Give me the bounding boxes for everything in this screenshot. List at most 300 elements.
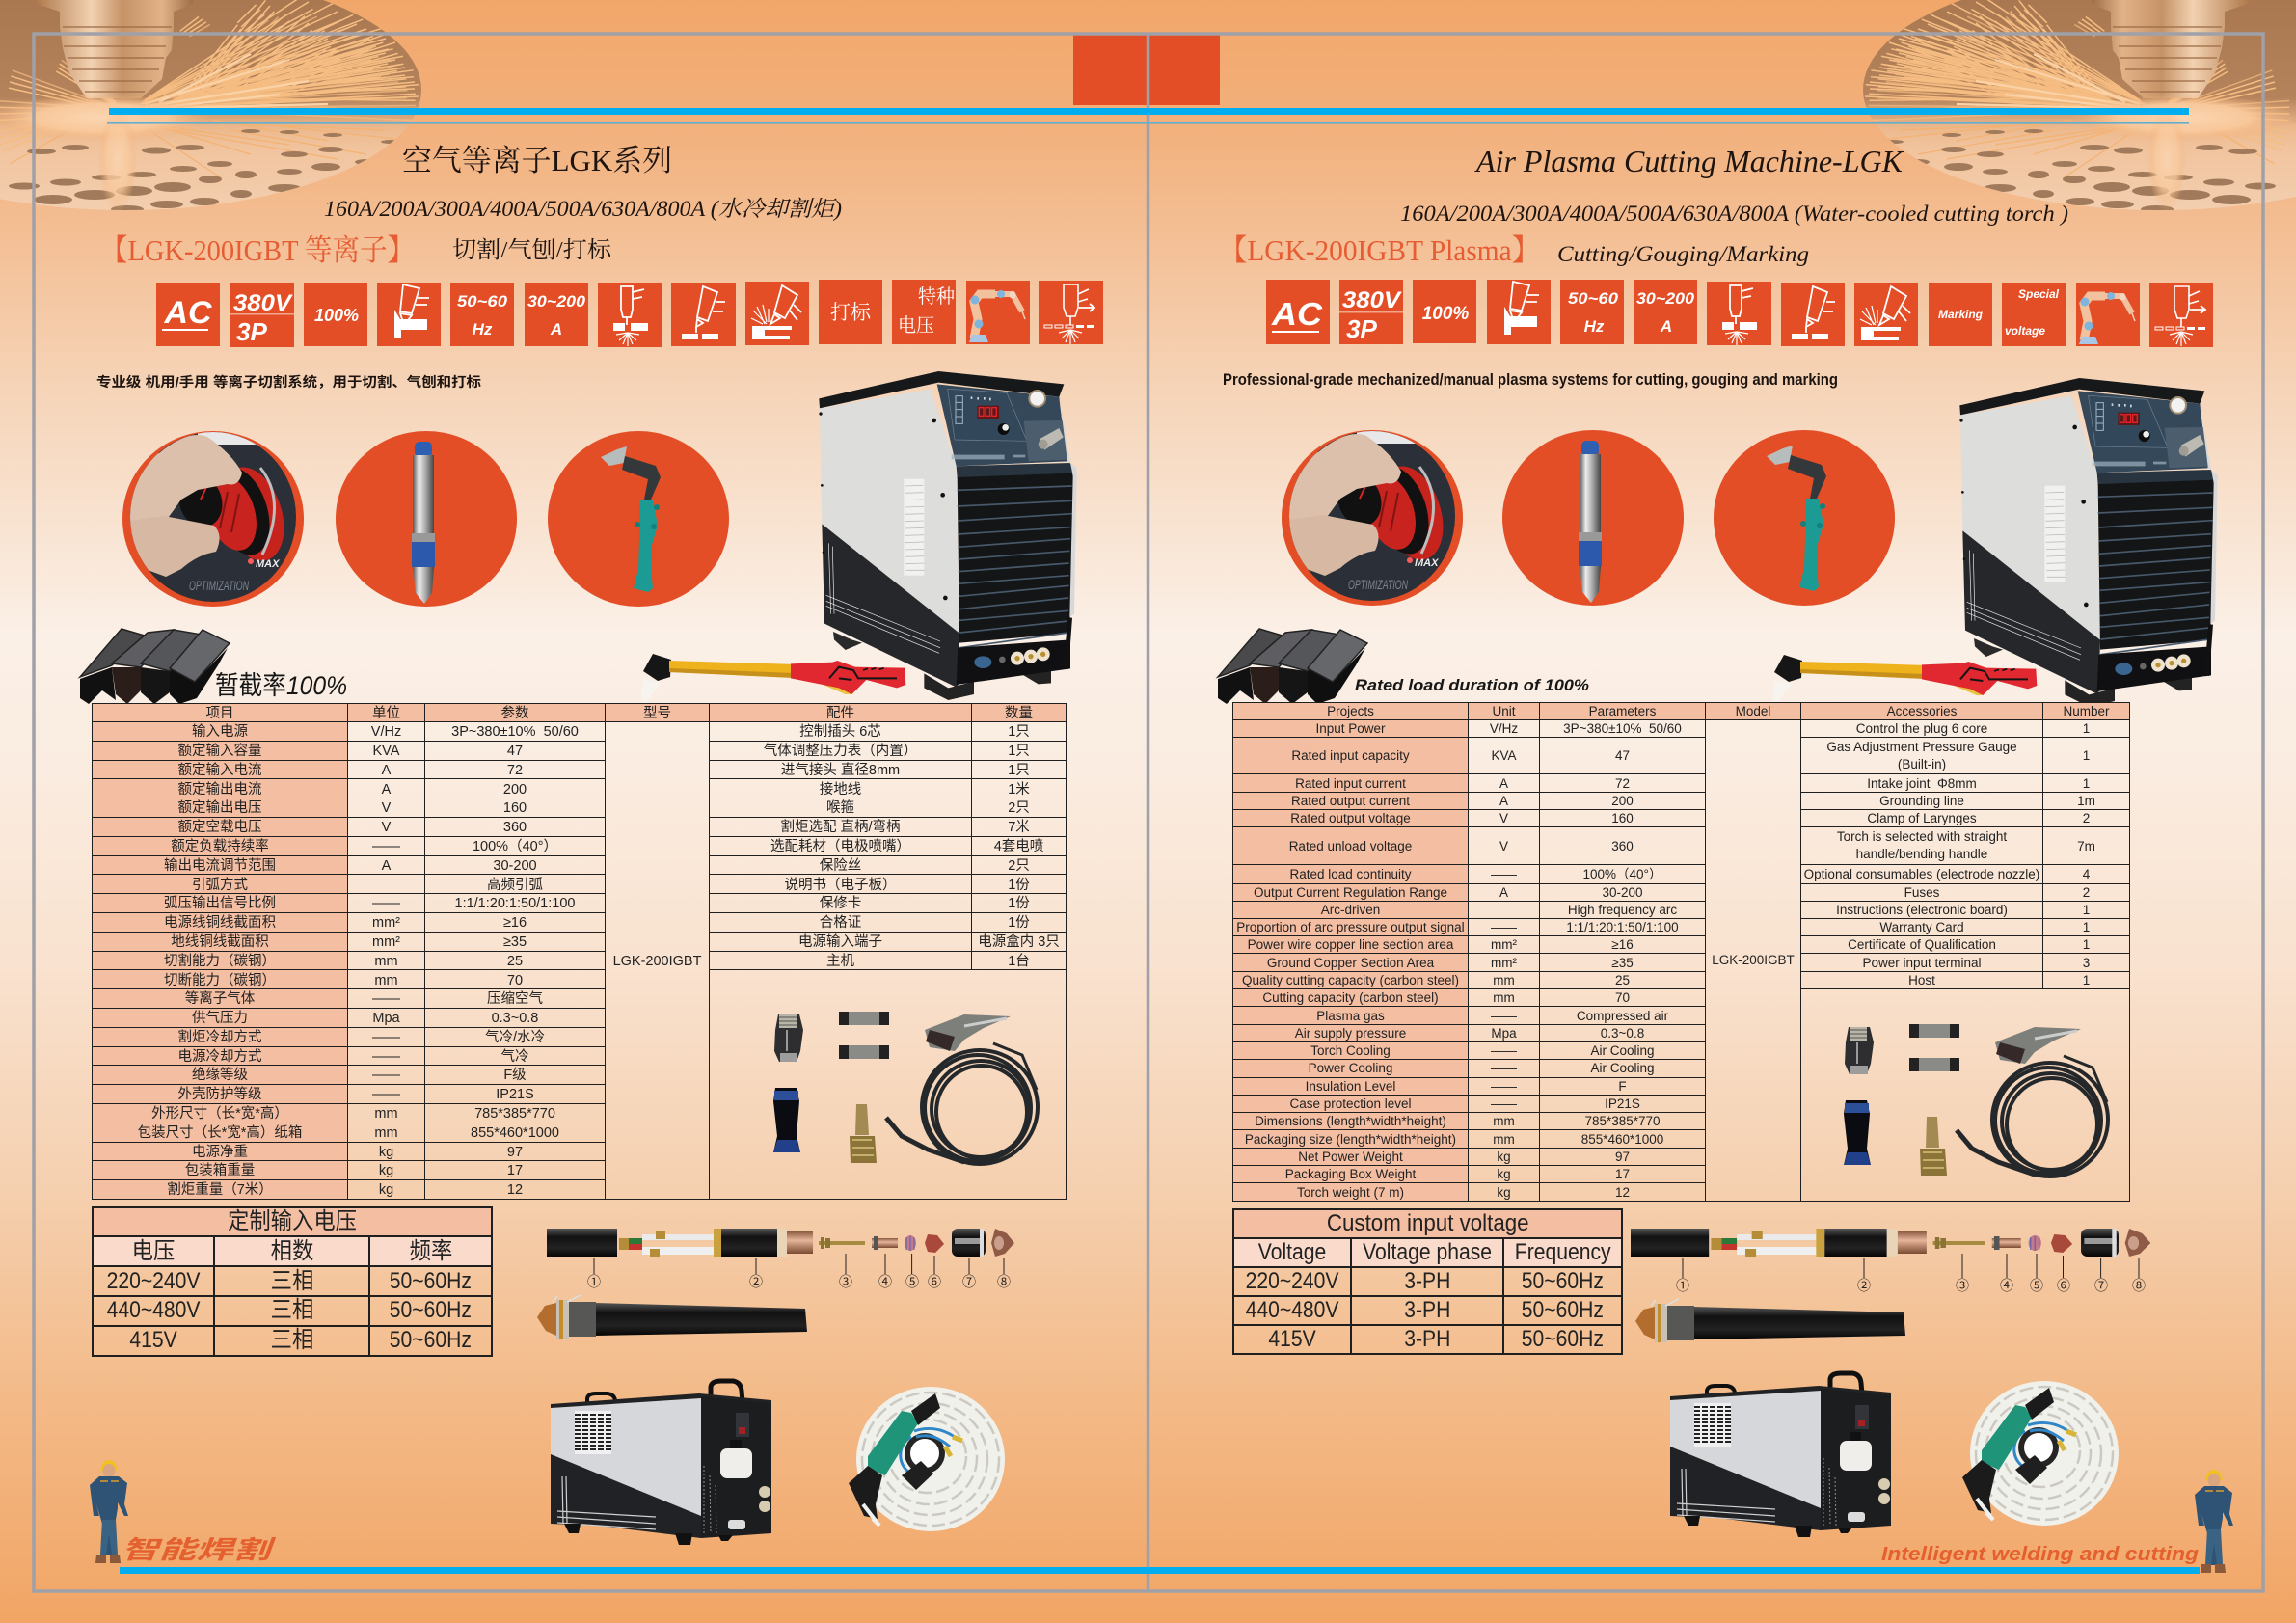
left feature photo: hand torch: [548, 431, 729, 607]
icon: marking: Marking: [1938, 308, 1984, 321]
icon: 50~60 Hz: 50~60: [457, 292, 508, 311]
left custom voltage table: 电压: [132, 1238, 175, 1263]
left specification table: 7米: [1008, 820, 1030, 835]
left specification table: 1份: [1008, 878, 1030, 893]
right specification table: ——: [1491, 1096, 1517, 1111]
right specification table: Rated input current: [1295, 776, 1406, 791]
left specification table: 70: [507, 972, 523, 987]
right torch parts diagram: ③: [1956, 1278, 1969, 1293]
right specification table: mm: [1493, 990, 1515, 1005]
icon: 100%: [1413, 280, 1476, 343]
left feature photo: machine torch: [336, 431, 517, 607]
icon: moving torch: [2149, 283, 2213, 347]
icon: sparks torch: [1854, 283, 1918, 346]
left specification table: KVA: [373, 744, 399, 759]
left specification table: 控制插头 6芯: [799, 724, 881, 740]
left specification table: 3P~380±10% 50/60: [451, 724, 579, 740]
left specification table: 电源净重: [192, 1145, 248, 1160]
left custom voltage table: 三相: [270, 1267, 313, 1294]
icon: special voltage: [2002, 283, 2066, 346]
right specification table: Clamp of Larynges: [1867, 811, 1977, 825]
icon: 100%: 100%: [1422, 304, 1469, 324]
right specification table: Torch weight (7 m): [1297, 1184, 1404, 1200]
left specification table: 输出电流调节范围: [164, 858, 276, 874]
left specification table: 额定输入电流: [177, 763, 262, 778]
icon: 380V 3P: 380V: [233, 290, 293, 316]
left specification table: 1只: [1008, 744, 1030, 759]
right duty cycle label: Rated load duration of 100%: [1355, 677, 1589, 694]
right specification table: Rated unload voltage: [1289, 839, 1412, 853]
right specification table: Warranty Card: [1879, 920, 1964, 934]
right specification table: 97: [1615, 1150, 1630, 1164]
right specification table: 1m: [2077, 794, 2095, 808]
right custom voltage table: 50~60Hz: [1522, 1268, 1604, 1294]
left title: 空气等离子LGK系列: [402, 144, 672, 177]
icon: 50~60 Hz: Hz: [473, 320, 493, 338]
right specification table: Accessories: [1887, 704, 1957, 718]
right feature photo: machine torch: [1502, 430, 1684, 606]
right torch parts diagram: [1631, 1229, 2150, 1293]
left specification table: F级: [503, 1068, 527, 1083]
right specification table: 3: [2083, 956, 2090, 970]
right subtitle: 160A/200A/300A/400A/500A/630A/800A (Water-cooled cutting torch ): [1400, 202, 2068, 226]
left specification table: 绝缘等级: [192, 1068, 248, 1083]
right specification table: Output Current Regulation Range: [1254, 885, 1447, 900]
right specification table: 1: [2083, 748, 2090, 763]
left specification table: 1只: [1008, 724, 1030, 740]
icon: 380V 3P: 3P: [236, 317, 268, 346]
right specification table: ——: [1491, 1009, 1517, 1023]
left specification table: 1:1/1:20:1:50/1:100: [455, 896, 575, 911]
left specification table: 1米: [1008, 782, 1030, 798]
right torch coil: [1962, 1381, 2119, 1526]
icon: 100%: 100%: [314, 306, 359, 325]
left specification table: ≥35: [503, 934, 527, 950]
icon: 100%: [304, 283, 367, 346]
bottom blue bar: [120, 1567, 2200, 1574]
right yellow torch: [1772, 655, 2037, 710]
right specification table: A: [1499, 794, 1508, 808]
left torch parts diagram: ⑧: [997, 1274, 1011, 1289]
left specification table: 主机: [826, 954, 854, 969]
left specification table: 97: [507, 1145, 523, 1160]
left torch parts diagram: ③: [839, 1274, 852, 1289]
right specification table: 12: [1615, 1184, 1630, 1200]
left long torch: [537, 1295, 807, 1339]
left custom voltage table: 相数: [270, 1238, 313, 1263]
left model heading: 【LGK-200IGBT 等离子】: [100, 233, 415, 267]
right specification table: Quality cutting capacity (carbon steel): [1242, 973, 1459, 987]
right specification table: Rated output current: [1291, 794, 1410, 808]
right specification table: Torch Cooling: [1310, 1043, 1391, 1058]
right torch parts diagram: ④: [2000, 1278, 2013, 1293]
left specification table: 额定空载电压: [177, 820, 262, 835]
right custom voltage table: 415V: [1268, 1326, 1316, 1352]
left specification table: 地线铜线截面积: [171, 934, 269, 950]
left custom voltage table: 220~240V: [107, 1267, 200, 1294]
left specification table: 割炬重量（7米）: [167, 1182, 273, 1198]
right specification table: Power Cooling: [1309, 1061, 1392, 1075]
right specification table: 160: [1611, 811, 1634, 825]
left specification table: 保修卡: [820, 896, 861, 911]
left specification table: 说明书（电子板）: [785, 878, 897, 893]
right specification table: Intake joint Φ8mm: [1867, 776, 1977, 791]
right specification table: 0.3~0.8: [1601, 1026, 1644, 1041]
left custom voltage table: 440~480V: [107, 1297, 200, 1323]
right specification table: 25: [1615, 973, 1630, 987]
right specification table: Net Power Weight: [1298, 1150, 1403, 1164]
left specification table: 气体调整压力表（内置）: [764, 744, 917, 759]
left custom voltage table: 50~60Hz: [390, 1267, 472, 1294]
left specification table: ——: [372, 991, 400, 1007]
right specification table: Power input terminal: [1862, 956, 1982, 970]
left icon row: [156, 280, 1103, 347]
left specification table: 12: [507, 1182, 523, 1198]
left specification table: 1台: [1008, 954, 1030, 969]
right tagline: Professional-grade mechanized/manual plasma systems for cutting, gouging and marking: [1223, 370, 1838, 389]
right specification table: High frequency arc: [1568, 903, 1677, 917]
icon: marking: [819, 280, 882, 344]
icon: AC: [156, 283, 220, 346]
right specification table: Model: [1736, 704, 1770, 718]
right specification table: Compressed air: [1577, 1009, 1668, 1023]
left specification table: 接地线: [820, 782, 861, 798]
right specification table: 30-200: [1602, 885, 1643, 900]
left specification table: mm: [374, 1125, 398, 1141]
icon: AC: AC: [163, 295, 212, 330]
icon: marking: [1929, 283, 1992, 346]
right torch parts diagram: ⑦: [2094, 1278, 2108, 1293]
icon: 380V 3P: [1339, 280, 1403, 344]
right specification table: A: [1499, 776, 1508, 791]
left specification table: 高频引弧: [487, 878, 543, 893]
left custom voltage table: 三相: [270, 1327, 313, 1353]
right specification table: ≥35: [1611, 956, 1634, 970]
icon: robot arm: [2076, 283, 2140, 346]
decoration: laser cutting photo, top left: [0, 0, 482, 231]
right feature photo: hand torch: [1714, 430, 1895, 606]
icon: cutting: [598, 283, 662, 347]
right specification table: ——: [1491, 920, 1517, 934]
right specification table: Packaging Box Weight: [1285, 1167, 1416, 1181]
right specification table: LGK-200IGBT: [1712, 953, 1795, 967]
left specification table: kg: [379, 1145, 393, 1160]
left slogan: 智能焊割: [122, 1535, 277, 1564]
right specification table: Air Cooling: [1590, 1043, 1655, 1058]
left specification table: 2只: [1008, 858, 1030, 874]
left specification table: [92, 703, 1067, 1200]
left specification table: 1份: [1008, 915, 1030, 931]
left specification table: 1份: [1008, 896, 1030, 911]
left specification table: 单位: [372, 706, 400, 721]
right custom voltage table: 440~480V: [1246, 1297, 1338, 1323]
left specification table: mm²: [372, 915, 400, 931]
left specification table: 额定输入容量: [177, 744, 262, 759]
left specification table: IP21S: [496, 1087, 534, 1102]
left duty cycle label: 暂截率100%: [215, 671, 347, 700]
right specification table: 855*460*1000: [1581, 1132, 1663, 1147]
right specification table: Optional consumables (electrode nozzle): [1804, 867, 2039, 881]
right specification table: Air supply pressure: [1295, 1026, 1406, 1041]
right custom voltage table: [1232, 1208, 1623, 1355]
right slogan: Intelligent welding and cutting: [1881, 1544, 2199, 1565]
right specification table: F: [1618, 1079, 1627, 1094]
right specification table: Fuses: [1904, 885, 1939, 900]
right model heading: 【LGK-200IGBT Plasma】: [1219, 233, 1540, 267]
decoration: laser cutting photo, top right: [1802, 0, 2296, 231]
left specification table: mm: [374, 1106, 398, 1122]
right specification table: V: [1499, 839, 1508, 853]
left specification table: 压缩空气: [487, 991, 543, 1007]
right specification table: 4: [2083, 867, 2090, 881]
left specification table: 785*385*770: [474, 1106, 555, 1122]
right specification table: 200: [1611, 794, 1634, 808]
right specification table: 1: [2083, 776, 2090, 791]
left specification table: A: [382, 858, 391, 874]
right custom voltage table: Voltage: [1258, 1239, 1326, 1265]
right specification table: 1: [2083, 937, 2090, 952]
icon: 380V 3P: [230, 283, 294, 347]
right plasma power source: [1959, 378, 2218, 707]
right specification table: mm²: [1491, 937, 1517, 952]
right specification table: Power wire copper line section area: [1248, 937, 1453, 952]
left subtitle: 160A/200A/300A/400A/500A/630A/800A (水冷却割炬): [324, 197, 842, 221]
right specification table: Input Power: [1315, 721, 1386, 736]
right specification table: Gas Adjustment Pressure Gauge: [1826, 740, 2017, 754]
left specification table: V/Hz: [371, 724, 401, 740]
left specification table: 360: [503, 820, 527, 835]
icon: AC: [1266, 280, 1330, 344]
left specification table: 855*460*1000: [471, 1125, 559, 1141]
icon: 50~60 Hz: 50~60: [1568, 289, 1619, 308]
right specification table: Number: [2063, 704, 2110, 718]
right custom voltage table: Voltage phase: [1363, 1239, 1492, 1265]
right torch parts diagram: ②: [1857, 1278, 1871, 1293]
left custom voltage table: 三相: [270, 1297, 313, 1323]
left functions: 切割/气刨/打标: [452, 237, 612, 263]
right specification table: 17: [1615, 1167, 1630, 1181]
right specification table: 3P~380±10% 50/60: [1563, 721, 1682, 736]
right specification table: Rated input capacity: [1291, 748, 1410, 763]
left specification table: 进气接头 直径8mm: [781, 763, 900, 778]
left specification table: 200: [503, 782, 527, 798]
left specification table: 保险丝: [820, 858, 861, 874]
left specification table: kg: [379, 1163, 393, 1178]
left torch parts diagram: ⑤: [905, 1274, 919, 1289]
icon: 50~60 Hz: [450, 283, 514, 346]
left water cooler: [551, 1381, 771, 1545]
right specification table: 47: [1615, 748, 1630, 763]
left specification table: 额定输出电流: [177, 782, 262, 798]
right specification table: Packaging size (length*width*height): [1245, 1132, 1456, 1147]
right specification table: 1: [2083, 973, 2090, 987]
right specification table: IP21S: [1605, 1096, 1640, 1111]
right specification table: 1: [2083, 903, 2090, 917]
right specification table: ——: [1491, 1061, 1517, 1075]
icon: special voltage: 电压: [898, 314, 934, 337]
left feature photo: knob: [122, 429, 309, 612]
right specification table: KVA: [1491, 748, 1516, 763]
right specification table: mm: [1493, 1132, 1515, 1147]
left custom voltage table: 50~60Hz: [390, 1327, 472, 1353]
right specification table: Air Cooling: [1590, 1061, 1655, 1075]
left torch parts diagram: ⑦: [962, 1274, 976, 1289]
left specification table: 割炬冷却方式: [177, 1030, 262, 1045]
left yellow torch: [641, 654, 905, 709]
left specification table: 额定输出电压: [177, 800, 262, 816]
right specification table: ≥16: [1611, 937, 1634, 952]
right specification table: Certificate of Qualification: [1848, 937, 1996, 952]
left specification table: 外形尺寸（长*宽*高）: [151, 1106, 288, 1122]
left specification table: 选配耗材（电极喷嘴）: [770, 839, 910, 854]
center red tabs: [1073, 35, 1220, 105]
left specification table: ——: [372, 1068, 400, 1083]
right specification table: Mpa: [1491, 1026, 1517, 1041]
right specification table: Insulation Level: [1306, 1079, 1395, 1094]
left specification table: 供气压力: [192, 1011, 248, 1026]
icon: moving torch: [1039, 281, 1103, 344]
right specification table: 360: [1611, 839, 1634, 853]
icon: 30~200 A: A: [1660, 317, 1672, 336]
left specification table: 1只: [1008, 763, 1030, 778]
icon: 30~200 A: A: [550, 320, 562, 338]
left custom voltage table: [92, 1206, 493, 1357]
right specification table: kg: [1497, 1184, 1511, 1200]
icon: special voltage: 特种: [918, 285, 955, 308]
left custom voltage table: 415V: [129, 1327, 177, 1353]
right specification table: Projects: [1327, 704, 1374, 718]
icon: special voltage: Special: [2018, 287, 2060, 301]
left torch parts diagram: ④: [878, 1274, 892, 1289]
right specification table: Torch is selected with straight: [1837, 829, 2007, 844]
icon: robot arm: [966, 281, 1030, 344]
icon: torch and joint: [1487, 280, 1551, 344]
left specification table: 25: [507, 954, 523, 969]
left specification table: 17: [507, 1163, 523, 1178]
left specification table: 配件: [826, 706, 854, 721]
right functions: Cutting/Gouging/Marking: [1557, 242, 1809, 266]
left specification table: 30-200: [493, 858, 537, 874]
right specification table: ——: [1491, 1043, 1517, 1058]
right specification table: Control the plug 6 core: [1856, 721, 1987, 736]
left accessories photo: [773, 1012, 1038, 1164]
left specification table: 2只: [1008, 800, 1030, 816]
right custom voltage table: 3-PH: [1404, 1297, 1450, 1323]
left torch parts diagram: [547, 1229, 1014, 1289]
left specification table: 电源盒内 3只: [978, 934, 1060, 950]
right specification table: kg: [1497, 1150, 1511, 1164]
left specification table: A: [382, 782, 391, 798]
left specification table: 割炬选配 直柄/弯柄: [780, 820, 901, 835]
right custom voltage table: 50~60Hz: [1522, 1297, 1604, 1323]
right specification table: Rated output voltage: [1290, 811, 1411, 825]
right specification table: Cutting capacity (carbon steel): [1262, 990, 1439, 1005]
icon: AC: AC: [1271, 296, 1323, 332]
right specification table: Unit: [1492, 704, 1516, 718]
left specification table: ——: [372, 896, 400, 911]
left specification table: 气冷/水冷: [485, 1030, 545, 1045]
left specification table: 合格证: [820, 915, 861, 931]
right specification table: Plasma gas: [1316, 1009, 1385, 1023]
right specification table: V/Hz: [1490, 721, 1518, 736]
left specification table: V: [382, 820, 391, 835]
left specification table: 输入电源: [192, 724, 248, 740]
left specification table: 型号: [643, 706, 671, 721]
left specification table: 100%（40°）: [473, 839, 557, 854]
icon: 30~200 A: 30~200: [527, 292, 586, 311]
right specification table: 72: [1615, 776, 1630, 791]
right feature photo: knob: [1282, 428, 1468, 611]
right specification table: V: [1499, 811, 1508, 825]
right title: Air Plasma Cutting Machine-LGK: [1474, 144, 1904, 178]
left specification table: 切断能力（碳钢）: [164, 972, 276, 987]
icon: cutting: [1707, 282, 1771, 345]
left specification table: 外壳防护等级: [177, 1087, 262, 1102]
right specification table: Ground Copper Section Area: [1267, 956, 1434, 970]
right specification table: Parameters: [1589, 704, 1656, 718]
right accessories photo: [1844, 1024, 2108, 1177]
right specification table: 1: [2083, 920, 2090, 934]
right specification table: 785*385*770: [1584, 1114, 1661, 1128]
right specification table: handle/bending handle: [1856, 847, 1987, 861]
right long torch: [1635, 1299, 1905, 1342]
icon: 50~60 Hz: [1560, 280, 1624, 344]
icon: marking: 打标: [830, 301, 872, 324]
left torch parts diagram: ②: [749, 1274, 763, 1289]
right cut samples: [1218, 629, 1367, 704]
icon: 30~200 A: 30~200: [1636, 289, 1695, 308]
left specification table: 4套电喷: [994, 839, 1043, 854]
left specification table: 弧压输出信号比例: [164, 896, 276, 911]
right specification table: 70: [1615, 990, 1630, 1005]
right specification table: [1232, 702, 2130, 1202]
icon: gouging: [1781, 283, 1845, 346]
right specification table: Rated load continuity: [1289, 867, 1412, 881]
left specification table: 切割能力（碳钢）: [164, 954, 276, 969]
icon: 50~60 Hz: Hz: [1584, 317, 1605, 336]
icon: 30~200 A: [1634, 280, 1697, 344]
right torch parts diagram: ⑧: [2132, 1278, 2146, 1293]
icon: torch and joint: [377, 283, 441, 346]
left specification table: 电源冷却方式: [177, 1049, 262, 1065]
right specification table: mm: [1493, 973, 1515, 987]
right custom voltage table: 50~60Hz: [1522, 1326, 1604, 1352]
left specification table: 包装尺寸（长*宽*高）纸箱: [138, 1125, 302, 1141]
right specification table: Host: [1908, 973, 1935, 987]
left specification table: A: [382, 763, 391, 778]
right torch parts diagram: ⑥: [2057, 1278, 2070, 1293]
right specification table: mm: [1493, 1114, 1515, 1128]
left plasma power source: [819, 371, 1077, 700]
icon: gouging: [671, 283, 736, 346]
right specification table: A: [1499, 885, 1508, 900]
icon: 380V 3P: 3P: [1346, 314, 1378, 343]
icon: 30~200 A: [525, 283, 588, 346]
left torch parts diagram: ⑥: [928, 1274, 941, 1289]
left specification table: Mpa: [372, 1011, 400, 1026]
right custom voltage table: 3-PH: [1404, 1326, 1450, 1352]
right specification table: 2: [2083, 885, 2090, 900]
right specification table: 7m: [2077, 839, 2095, 853]
left specification table: kg: [379, 1182, 393, 1198]
right torch parts diagram: ①: [1676, 1278, 1689, 1293]
left specification table: 160: [503, 800, 527, 816]
left specification table: ——: [372, 1087, 400, 1102]
left specification table: LGK-200IGBT: [613, 954, 701, 969]
right specification table: Proportion of arc pressure output signal: [1236, 920, 1465, 934]
right specification table: Instructions (electronic board): [1836, 903, 2008, 917]
left specification table: mm: [374, 954, 398, 969]
